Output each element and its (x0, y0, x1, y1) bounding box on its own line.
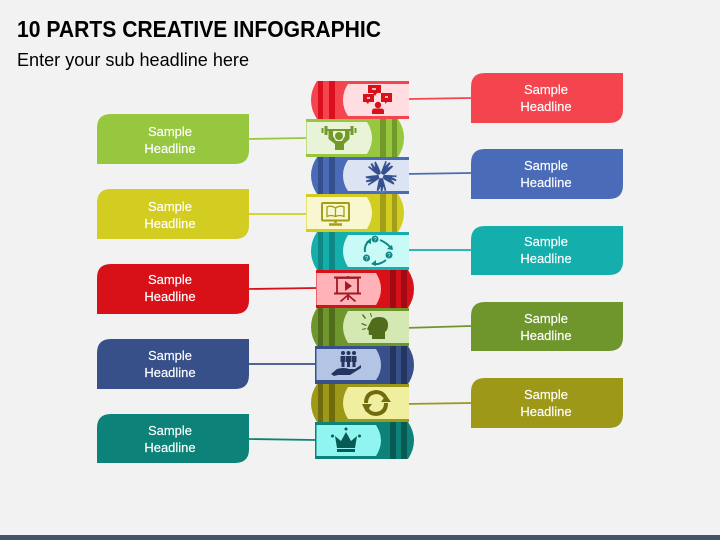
book 4 yellow (306, 194, 404, 232)
callout: left 1 green: Sample (148, 124, 192, 139)
icon: question cycle: ? (365, 256, 369, 262)
icon: weightlifter (322, 126, 356, 150)
callout: left 2 yellow: Sample (148, 199, 192, 214)
icon: crown (331, 428, 361, 452)
callout: right 4 olive: Headline (520, 328, 572, 343)
book 10 teal (315, 422, 414, 459)
book 3 blue (311, 157, 409, 194)
callout: right 4 olive (471, 302, 623, 351)
callout: right 5 dark yellow: Headline (520, 404, 572, 419)
callout: left 2 yellow (97, 189, 249, 239)
callout: left 1 green (97, 114, 249, 164)
callout: left 4 navy: Sample (148, 348, 192, 363)
icon: hand holding people (331, 351, 361, 376)
icon: head with rays (361, 313, 388, 339)
callout: left 1 green: Headline (144, 141, 196, 156)
book 2 green (306, 119, 404, 157)
icon: refresh arrows (362, 392, 391, 414)
callout: right 2 blue: Headline (520, 175, 572, 190)
connector lines (249, 98, 471, 440)
callout: left 5 teal: Sample (148, 423, 192, 438)
callout: left 3 red: Sample (148, 272, 192, 287)
book 5 teal (311, 232, 409, 270)
callout: left 4 navy: Headline (144, 365, 196, 380)
icon: presentation board (334, 276, 361, 302)
callout: right 1 red (471, 73, 623, 123)
footer bar (0, 535, 720, 540)
callout: right 3 teal (471, 226, 623, 275)
callout: right 1 red: Headline (520, 99, 572, 114)
callout: right 3 teal: Headline (520, 251, 572, 266)
icon: question cycle: ? (387, 254, 391, 260)
callout: right 5 dark yellow (471, 378, 623, 428)
icon: five hands star (364, 160, 398, 192)
callout: right 5 dark yellow: Sample (524, 387, 568, 402)
book 7 olive (311, 308, 409, 346)
book 9 dark yellow (311, 384, 409, 422)
book 6 red (316, 270, 414, 308)
icon: question cycle (363, 236, 393, 266)
callout: left 3 red (97, 264, 249, 314)
title: 10 PARTS CREATIVE INFOGRAPHIC (17, 16, 381, 42)
callout: left 4 navy (97, 339, 249, 389)
icon: question cycle: ? (373, 238, 377, 244)
callout: right 1 red: Sample (524, 82, 568, 97)
book 8 navy (315, 346, 414, 384)
callout: left 5 teal (97, 414, 249, 463)
book 1 red (311, 81, 409, 119)
callout: left 5 teal: Headline (144, 440, 196, 455)
callout: right 3 teal: Sample (524, 234, 568, 249)
callout: right 2 blue: Sample (524, 158, 568, 173)
callout: left 3 red: Headline (144, 289, 196, 304)
callout: right 2 blue (471, 149, 623, 199)
icon: monitor with book (322, 203, 349, 224)
subtitle: Enter your sub headline here (17, 49, 249, 70)
callout: right 4 olive: Sample (524, 311, 568, 326)
callout: left 2 yellow: Headline (144, 216, 196, 231)
icon: speech bubbles and person (363, 85, 392, 114)
